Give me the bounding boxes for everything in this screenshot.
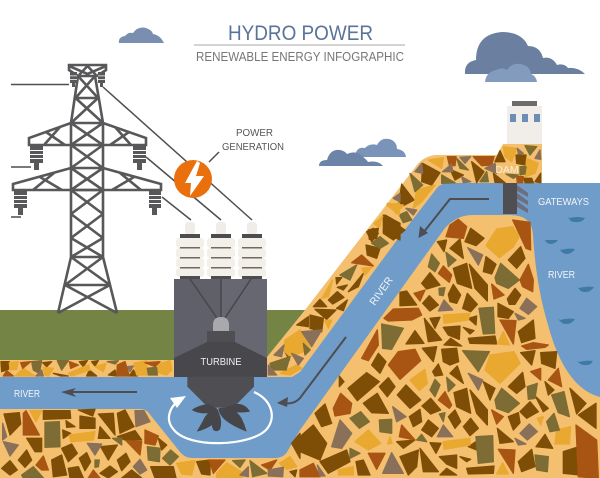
power lines [11,84,252,220]
label: power generation: GENERATION [222,141,284,153]
arrow: lower flow [277,337,346,407]
tower body [58,76,117,313]
title: HYDRO POWER [228,22,373,45]
turbine runner [187,377,254,432]
rocks: lower left bed [2,409,300,478]
subtitle: RENEWABLE ENERGY INFOGRAPHIC [196,49,404,64]
tower lower arm [13,168,161,190]
transmission tower [13,65,161,313]
cloud: large [465,32,585,82]
tower insulators [14,72,161,215]
rocks: upper strip and dam [368,146,541,240]
label: power generation: POWER [236,127,273,139]
label: turbine: TURBINE [200,356,242,368]
rocks: hill top [400,219,537,314]
rocks: lower strip [268,193,400,375]
rocks: left strip [1,361,172,376]
arrow: upper flow [418,199,489,238]
label: river diagonal: RIVER [367,274,396,308]
pointer line [209,152,219,162]
fish in reservoir [545,217,594,365]
water: river and reservoir [0,183,600,458]
turbine housing [174,279,267,377]
dam building [507,101,542,144]
label: gateways: GATEWAYS [538,196,589,208]
tower upper arm [29,123,146,145]
grass [0,310,310,362]
ground sand [0,144,600,478]
tower top arm [69,65,106,76]
dam gateway [503,183,528,214]
icon: power generation [174,160,212,198]
cloud: small top [119,28,164,43]
label: power generation [222,127,284,153]
rocks: hill body [300,303,598,478]
arrow: left river flow [61,388,137,397]
label: river right: RIVER [548,269,575,281]
label: dam: DAM [495,164,519,176]
turbine rotation arrow [169,392,272,443]
cloud: small middle [319,139,406,166]
transformer insulators [176,222,266,279]
label: river left: RIVER [14,388,40,400]
tower bracing [58,76,117,313]
